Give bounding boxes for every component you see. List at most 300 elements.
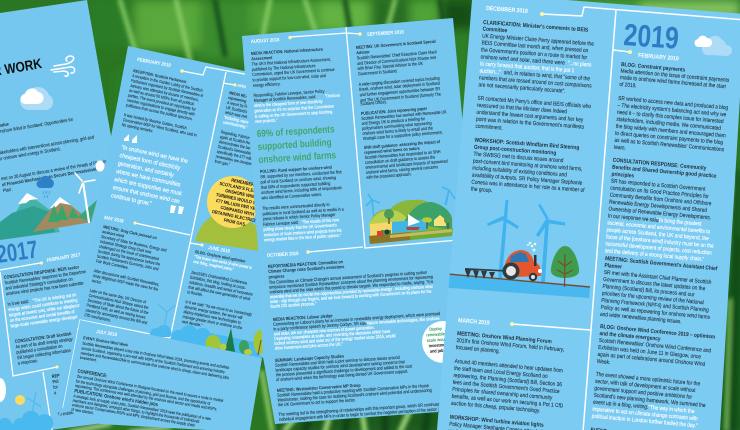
text: 2017 consultation: In it we said:: [7, 298, 29, 307]
callout: white circle quote: [422, 321, 446, 363]
text: report stub: a: [54, 390, 57, 395]
text: clarification: point was in relation to the Government's manifesto: [476, 116, 584, 131]
label: July 2018: JULY 2018: [96, 329, 118, 337]
text: Landscape Capacity Studies: Scottish Renewables and SNH held a joint seminar to discuss issues around: [275, 354, 401, 368]
text: Assistant Chief Planner: [600, 256, 718, 328]
text: Committee on Climate Change: essential that we do not let the opportunities provided by renewable energy - including onshore wind: [270, 283, 433, 299]
text: National Infrastructure Assessment: "Onshore: [325, 92, 341, 99]
text: polling: exclusion of most onshore wind projects from the: [264, 227, 343, 237]
text: Labour pledge: [273, 312, 440, 350]
text: constraint payments and consultation: and the delivery of a strong local supply chain.": [605, 248, 704, 263]
text: May 2018: Later on the same day, UK Director of: [89, 288, 147, 305]
text: constraint payments and consultation: CONSULTATION RESPONSE: Community: [612, 157, 707, 172]
timeline: February to July: [63, 67, 300, 408]
text: March 2019: focused on planning.: [456, 345, 500, 355]
text: Landscape Capacity Studies: landscape capacity studies for onshore wind development raising concerns that: [275, 359, 406, 373]
text: Landscape Capacity Studies: of onshore wind when the technology was being denied UK Government support.: [276, 368, 408, 382]
text: April column: "Including, repowering and new: [224, 115, 271, 130]
text: Assistant Chief Planner: priorities for the upcoming review of the National: [602, 291, 704, 306]
text: National Infrastructure Assessment: Assessment: [251, 55, 273, 61]
text: March 2019: auction for this cheap, popular technology.: [451, 400, 540, 415]
text: May 2018: CfD mechanisms.: [84, 313, 111, 323]
text: July 2018: repowering. The conference was well attended by the onshore wind sector and media and MSPs.: [75, 384, 218, 412]
text: constraint payments and consultation: principles: [611, 171, 634, 180]
text: polling: press release in which Senior Policy Manager: [263, 212, 336, 222]
text: National Infrastructure Assessment: to provide support for low-cost wind, solar and: [252, 73, 326, 83]
text: clarification: numbers that are tossed around on cost comparisons: [479, 75, 592, 90]
callout: white circle quote: investment: [428, 342, 449, 348]
text: Westminster Conservative MP Group: the UK Government to act to support the sector.: [278, 397, 356, 407]
text: September meeting: A wide-ranging discussion covered topics including: [359, 75, 440, 87]
text: reception: member organisations to engage directly with: [127, 98, 195, 117]
text: Onshore Wind Conference 2019: again as part of celebrations around Onshore Wind: [597, 352, 705, 368]
text: July 2018: Our annual Onshore Wind Conference in Glasgow focussed on the need to secure a route to market: [76, 374, 224, 403]
text: April column: which was met with interest.: [225, 110, 267, 124]
label: June 2018: JUNE 2018: [208, 245, 231, 254]
text: Committee on Climate Change: REPORT/MEDIA REACTION: Committee on: [268, 259, 344, 269]
text: Assistant Chief Planner: and wider renewables planning issues.: [600, 311, 682, 325]
text: Labour pledge: locked onshore wind and solar out of the energy market since 2015, would: [274, 333, 396, 346]
text: constraint payments and consultation: BLOG: Constraint payments: [621, 62, 685, 74]
text: June 2018: ZeroSSE's OnshoreWind Conference: [191, 270, 248, 286]
text: report stub: REP: [51, 373, 60, 379]
text: Labour pledge: in a party conference speech by Jeremy Corbyn, SR said:: [273, 320, 368, 332]
text: clarification: the Government's position on a route to market for: [481, 47, 588, 61]
text: National Infrastructure Assessment: energy efficiency.: [253, 81, 281, 88]
quote: onshore wind: where we have communities: [115, 169, 181, 189]
illustration: clouds and trees: [150, 304, 266, 363]
text: constraint payments and consultation: "To bring the greatest: [656, 217, 702, 228]
text: June 2018: dynamic energy system, the sector will: [184, 305, 243, 320]
text: July 2018: Scottish Renewables played a key role in Onshore Wind Week 2018, promoting events and activities: [82, 341, 230, 370]
text: constraint payments and consultation: the blog widely with members and encouraged them: [615, 123, 727, 140]
stat: 69 percent: [257, 126, 336, 163]
text: April column: [214, 82, 290, 176]
quote: onshore wind: continue to grow.”: [110, 193, 152, 208]
text: clarification: Group post-construction monitoring: [474, 144, 556, 157]
text: July 2018: of new starters.: [71, 407, 94, 415]
label: August 2018: AUGUST 2018: [251, 37, 280, 44]
text: National Infrastructure Assessment: generation so it's no surprise that the Commission: [254, 103, 334, 113]
callout: yellow circle quote: OBTAINING ELECTRICITY: [211, 209, 261, 224]
text: May 2018: MEETING: Greg Clark pressed on: [103, 225, 158, 241]
text: Assistant Chief Planner: Government to discuss the latest updates on the: [603, 277, 706, 293]
text: National Infrastructure Assessment: wind is the cheapest form of new electricity: [254, 98, 323, 108]
text: reception: Parliament organised by Scottish Renewables in: [131, 79, 204, 98]
text: clarification: post-consent bird monitoring at onshore wind farms,: [473, 158, 583, 173]
text: March 2019: fees and the Scottish Government's Good Practice: [453, 379, 560, 395]
text: draft energy strategy: published a consultation on: [16, 343, 63, 355]
text: May 2018: Fair Work Committee.: [95, 259, 129, 270]
text: 2017 consultation: CONSULTATION RESPONSE: BEIS sector: [3, 264, 80, 280]
text: constraint payments and consultation: made to onshore wind farms increased at the start: [620, 75, 727, 90]
text: SNH draft guidance: [364, 138, 449, 180]
text: September meeting: Scottish Renewables' Chief Executive Claire Mack: [356, 49, 438, 61]
text: September meeting: Advisor: [356, 49, 370, 55]
text: 2017 consultation: "The UK is missing out on: [32, 292, 77, 303]
icon: wind turbines: [487, 200, 565, 282]
page: December 2018 to 2019: [437, 0, 740, 430]
text: constraint payments and consultation: Renewable Energy Developments and Shared: [609, 199, 707, 214]
text: clarification: "...no plans: [567, 60, 592, 69]
text: September meeting: Brexit, onshore wind, solar deployment in Scotland: [359, 80, 440, 92]
text: June 2018: deploy implement new technologies to: [183, 310, 241, 325]
text: June 2018: manage greater short or onshore on the: [182, 315, 243, 330]
text: September meeting: Scotland Office).: [360, 99, 387, 106]
text: Landscape Capacity Studies: SEMINAR: Landscape Capacity Studies: [275, 353, 345, 363]
text: intro: of Financial Mechanisms to Secure Decommissioning,: [2, 165, 102, 187]
text: polling: SR, supported by our members, conducted the first: [260, 169, 342, 179]
text: Assistant Chief Planner: Planning Framework (NPF4) and Scottish Planning: [601, 298, 709, 314]
callout: white circle quote: scale would: [426, 336, 449, 343]
text: September meeting: and The UK Government in Scotland (formerly The: [360, 91, 442, 103]
text: 2017 consultation: targets at lowest cost, while our allegiance: [9, 302, 81, 318]
text: clarification: The SWBSG met to discuss issues around: [473, 151, 564, 164]
text: constraint payments and consultation: Community Benefits from Onshore and Offshore: [609, 192, 712, 208]
text: constraint payments and consultation: to direct queries on constraint payments to the blog: [615, 130, 723, 146]
text: June 2018: "The brave new world of wind power is: [194, 255, 252, 270]
text: Onshore Wind Conference 2019: government support and positive ambitions for: [594, 385, 692, 401]
text: clarification: including suitability of existing conditions and: [472, 165, 567, 179]
text: repowering paper: Scottish Renewables has worked with Renewable UK: [361, 109, 447, 121]
text: clarification: auction...": [479, 68, 501, 76]
text: Assistant Chief Planner: Planning (Scotland) Bill, its process and our: [602, 284, 695, 299]
label: February 2017: FEBRUARY 2017: [46, 252, 81, 263]
text: repowering paper: and Energy UK to produce a briefing for: [361, 116, 426, 126]
text: May 2018: After discussions with Scottish Renewables,: [93, 269, 160, 287]
text: May 2018: caused by uncertainty around the Bill and: [85, 308, 148, 325]
text: July 2018: [71, 336, 232, 430]
text: reception: Conservative MSP for West Scotland, who said in: [122, 118, 197, 138]
text: Labour pledge: "Mature renewable technologies, like onshore: [365, 315, 440, 326]
text: constraint payments and consultation: as well as to Scottish Renewables' Communications: [614, 137, 725, 153]
icon: clouds 2019: [694, 36, 732, 56]
text: June 2018: Exhibition, this blog, looking at cross-: [190, 275, 247, 290]
text: National Infrastructure Assessment: [251, 45, 342, 124]
label: October 2018: OCTOBER 2018: [267, 251, 299, 258]
text: intro: [0, 106, 111, 194]
text: constraint payments and consultation: of 2019.: [619, 82, 637, 90]
text: September meeting: and further engagement opportunities between SR: [359, 86, 440, 97]
text: June 2018: one thing, imagined pains.": [193, 260, 235, 272]
text: 2017 consultation: energy which could contribute to meeting: [8, 297, 78, 312]
callout: yellow circle quote: FROM GAS.: [223, 217, 247, 227]
text: Westminster Conservative MP Group: The meeting led to the strengthening of relationships with this important group, which SR continues: [278, 401, 440, 417]
text: September meeting: Government in Scotland.: [358, 68, 398, 77]
callout: white circle quote: Deploy: [429, 326, 443, 332]
text: intro: met on 26 August to discuss a review of the Heads of Planning: [1, 158, 109, 182]
callout: yellow circle quote: [195, 175, 268, 251]
icon: rain cloud: [36, 176, 54, 198]
text: draft energy strategy: a response.: [17, 358, 38, 366]
text: SNH draft guidance: Scottish Renewables has responded to an SNH: [364, 149, 441, 160]
text: Assistant Chief Planner: Planner: [604, 263, 622, 271]
text: SNH draft guidance: environmental and landscape impacts of repowered: [365, 158, 448, 170]
label: February 2019: FEBRUARY 2019: [638, 53, 679, 63]
text: March 2019: repowering, the Planning (Scotland) Bill, Section 36: [453, 373, 562, 388]
text: reception: as well as around 50 MSPs from all political: [129, 88, 194, 106]
text: September meeting: [356, 38, 442, 106]
text: Committee on Climate Change: The Committee on Climate Change's annual assessment of Scotland's progress in cutting carbon: [269, 269, 428, 285]
text: April column: repowering: [228, 96, 247, 104]
text: Committee on Climate Change: [268, 260, 434, 308]
text: April column: specifically the £77 million: [216, 149, 256, 162]
text: polling: poll of rural Scotland on onshore wind, showing: [260, 175, 336, 185]
text: clarification: and, in relation to wind, that "some of the: [504, 70, 590, 83]
text: April column: UK Scotland's onshore wind fleet: [226, 105, 277, 120]
label: May 2018: MAY 2018: [104, 215, 124, 224]
text: Committee on Climate Change: progress: [268, 273, 285, 280]
text: polling: The results were communicated directly to: [262, 201, 330, 211]
text: SNH draft guidance: onshore wind farms, raising several concerns: [366, 164, 438, 175]
text: April column: MEDIA REACTION: UK Government: [229, 91, 287, 107]
text: Westminster Conservative MP Group: Westminster, making the case for realising Scotland's onshore wind potential and underscoring: [277, 387, 432, 403]
text: 2017 consultation: [3, 263, 96, 329]
text: Labour pledge: MEDIA REACTION: Labour pledge: [273, 313, 333, 322]
text: National Infrastructure Assessment: The UK's first National Infrastructure Assessment,: [251, 56, 331, 67]
text: Assistant Chief Planner: MEETING: Scottish Government's Assistant Chief: [605, 256, 718, 273]
text: Onshore Wind Conference 2019: imperative to act on climate change contrasts with: [592, 406, 698, 423]
text: reception: his opening remarks:: [121, 123, 153, 133]
quote: onshore wind: [109, 145, 189, 214]
text: Committee on Climate Change: onshore wind and the risks which this posed to climate targets. We responded to media, saying: "It is: [269, 279, 433, 295]
text: Landscape Capacity Studies: the process presented a significant challenge to development and added to the cost: [276, 363, 413, 377]
text: May 2018: Industrial Strategy Greg Clark was: [100, 239, 152, 255]
text: Westminster Conservative MP Group: Scottish Renewables held a productive meeting with Scottish Conservative MPs in the House: [277, 383, 430, 398]
text: clarification: availability of outputs. SR Policy Manager Stephanie: [472, 172, 583, 187]
page: our work and 2017: [0, 0, 125, 430]
illustration: tractor: [502, 242, 542, 281]
quote: onshore wind: ensure that onshore wind can: [112, 185, 180, 205]
text: SNH draft guidance: with the proposed approach.: [366, 171, 412, 180]
callout: white circle quote: and jobs: [430, 347, 446, 354]
text: May 2018: Communications Nick Sharpe asked the: [88, 293, 149, 310]
illustration: mountains: [0, 193, 97, 240]
text: polling: onshore wind farms, including 60% of respondents: [261, 185, 342, 195]
text: May 2018: Scottish Parliament's Economy, Jobs and: [97, 254, 159, 271]
text: Labour pledge: drive investment and jobs across the UK.": [275, 341, 344, 351]
illustration: ground: [437, 273, 590, 298]
text: constraint payments and consultation: SR worked to access new data and produced a blog: [618, 96, 729, 112]
text: constraint payments and consultation: need it – to clarify this complex issue for interested: [617, 110, 724, 125]
callout: white circle quote: renewables: [426, 331, 448, 338]
text: National Infrastructure Assessment: Commission, urged the UK Government to continue: [252, 67, 335, 77]
icon: white cloud small: [96, 160, 104, 172]
text: reception: RECEPTION: Scottish Parliament: [133, 69, 187, 84]
text: polling: POLLING: Rural support for onshore wind: [260, 164, 332, 174]
text: clarification: commitment.: [475, 123, 503, 132]
text: Committee on Climate Change: solar - slip through our fingers, and we look forward to working with Government on its plans for the: [270, 288, 432, 304]
text: September meeting: with Brian Roy, Special Advisor to the UK: [357, 60, 423, 71]
text: polling: politicians in rural Scotland as well as to media in a: [262, 206, 344, 217]
heading: 2019: 2019: [623, 17, 680, 55]
text: clarification: CLARIFICATION: Minister's comments to BEIS: [483, 20, 589, 34]
text: polling: polling show clearly that the UK Government's: [263, 222, 337, 232]
text: constraint payments and consultation: societal, economic and environmental benefits to: [607, 220, 710, 236]
text: Onshore Wind Conference 2019: event up in a blog, writing:: [593, 399, 649, 411]
text: repowering paper: [361, 107, 447, 140]
text: Labour pledge: Commenting on Labour's plans for an increase in renewable energy deployment, which were promised: [273, 311, 441, 327]
icon: opening quote marks: [124, 134, 137, 143]
timeline: 2017: [0, 261, 59, 430]
text: SNH draft guidance: repowered wind farms on nature: [364, 145, 421, 155]
text: clarification: Committee: [482, 26, 508, 34]
stat: 69 percent: supported building: [257, 137, 332, 152]
text: report stub: Pol: [52, 378, 59, 385]
text: March 2019: Principles for shared ownership and community: [452, 386, 553, 402]
text: Onshore Wind Conference 2019: Week.: [597, 359, 611, 366]
text: Assistant Chief Planner: SR met with the Assistant Chief Planner at Scottish: [604, 270, 712, 286]
text: April column: again at Scottish Renewables: [219, 135, 265, 149]
text: Westminster Conservative MP Group: individual engagement with MPs in order to begin to combat the negative perception of the sector: [279, 406, 438, 422]
illustration: sun, turbine and cloud: [0, 378, 53, 430]
text: constraint payments and consultation: consultation on its Good Practice Principles for: [610, 185, 709, 200]
text: Committee on Climate Change: fourth CfD auction process.": [270, 301, 317, 309]
page: February May June 2018: [58, 46, 300, 420]
text: clarification: to carry forward that auction; that is the pot 1: [480, 61, 575, 74]
text: May 2018: Andy Wightman MSP made the case for the: [92, 274, 159, 292]
text: reception: January was attended by dozens of members,: [130, 83, 199, 102]
text: National Infrastructure Assessment: MEDIA REACTION: National Infrastructure: [251, 46, 324, 56]
text: Westminster Conservative MP Group: MEETING: Westminster Conservative MP Group: [277, 382, 361, 393]
text: draft energy strategy: As part of its draft energy strategy: [15, 336, 74, 350]
text: Labour pledge: and solar, are our cheapest new sources of power generation.: [274, 324, 375, 336]
text: May 2018: sector.: [91, 279, 102, 285]
text: Onshore Wind Conference 2019: political inaction in London further fuelled the day.": [591, 413, 698, 430]
callout: yellow circle quote: £77 MILLION PER YEAR: [216, 198, 262, 213]
label: February 2018: FEBRUARY 2018: [137, 57, 172, 68]
text: constraint payments and consultation: [605, 62, 732, 264]
text: Onshore Wind Conference 2019: [590, 324, 716, 430]
text: June 2018: BLOG: Onshore wind optimism: [195, 250, 246, 264]
text: National Infrastructure Assessment: Responding, Fabrice Leveque, Senior Policy: [253, 88, 325, 98]
text: Onshore Wind Conference 2019: Exhibition was held on June 11 in Glasgow, once: [598, 345, 701, 361]
text: Onshore Wind Conference 2019: "The way in which the: [648, 404, 695, 415]
text: May 2018: Secretary of State about the future of the: [87, 298, 149, 315]
text: polling: that 69% of respondents supported building: [261, 180, 330, 190]
text: Onshore Wind Conference 2019: The event showed a more optimistic future for the: [595, 371, 700, 388]
icon: closing quote marks: [170, 205, 184, 214]
text: National Infrastructure Assessment: published by The National Infrastructure: [252, 63, 316, 72]
text: May 2018: onshore wind: [102, 230, 125, 239]
text: April column: commissioning.": [223, 120, 248, 130]
text: National Infrastructure Assessment: new projects.": [255, 117, 278, 124]
text: repowering paper: strategic case for a supportive policy environment.: [363, 129, 443, 141]
text: 2017 consultation: and Industrial Strategy's consultation on: [5, 276, 74, 291]
text: April column: Regarding, Fabrice Leveque: [220, 130, 264, 143]
text: report stub: for: [53, 384, 59, 390]
text: clarification: the group.: [471, 186, 493, 194]
text: repowering paper: PUBLICATION: Joint repowering paper: [361, 105, 428, 116]
text: May 2018: Scottish during his appearance before the: [98, 249, 161, 267]
text: July 2018: PUBLICATION: Onshore wind's hidden jobs: [74, 388, 159, 407]
text: Onshore Wind Conference 2019: sector, with talk of development at scale without: [595, 378, 696, 394]
text: constraint payments and consultation: In our response we said:: [608, 213, 660, 224]
illustration: plough: [465, 268, 503, 279]
text: clarification: [471, 20, 597, 201]
text: clarification: onshore wind and solar, said there were: [480, 54, 565, 67]
text: clarification: are not necessarily particularly accurate".: [478, 82, 566, 95]
text: Onshore Wind Conference 2019: and the climate emergency: [599, 331, 661, 343]
text: constraint payments and consultation: – The electricity system's balancing act and why we: [617, 103, 727, 119]
text: intro: Plan'.: [3, 186, 13, 193]
text: July 2018: A strategic look at supply chain jobs, Scottish Renewables' 2018 sees the publication of a new: [73, 394, 211, 421]
text: constraint payments and consultation: people across Scotland, the UK and beyond, the: [606, 227, 709, 242]
text: draft energy strategy: SR began collecting information: [17, 347, 72, 360]
text: March 2019: 2019's first Onshore Wind Forum, held in February,: [456, 338, 564, 354]
text: report stub: [51, 373, 62, 395]
text: April column: from gas.": [214, 159, 231, 167]
text: constraint payments and consultation: Benefits and Shared Ownership good practice: [612, 164, 717, 180]
text: clarification: reassured us that the Minister does indeed: [477, 102, 567, 116]
text: March 2019: benefits, as well as our work on securing a Pot 1 CfD: [451, 393, 564, 410]
text: June 2018: next decade.": [181, 319, 203, 328]
text: May 2018: Secretary of State for Business, Energy and: [101, 235, 167, 253]
text: Onshore Wind Conference 2019: Scotland's new planning framework. We summed the: [593, 392, 706, 409]
text: clarification: Conesa was in attendance in her role as a member of: [471, 179, 585, 194]
text: March 2019: Around 40 members attended to hear updates from: [454, 359, 564, 375]
text: March 2019: WORKSHOP: Wind turbine aviation lights: [449, 414, 544, 429]
text: 2017 consultation: onshore wind projects has now been submitted.: [6, 280, 87, 296]
quote: onshore wind: generation, and certainly: [117, 161, 174, 179]
text: July 2018: members and Renewables2Me to communicate that onshore wind is cheap, clean and delivering jobs: [80, 351, 229, 380]
icon: clouds: [20, 87, 53, 110]
text: 2017 consultation: Scottish Renewables' response to the Department: [4, 268, 90, 286]
stat: 69 percent: onshore wind farms: [258, 149, 336, 165]
text: SNH draft guidance: consultation on draft guidance to assess the: [365, 154, 436, 165]
text: July 2018: members and designed, amongst other things, to highlight the thousands of individuals: [72, 398, 200, 424]
text: constraint payments and consultation: successful development of projects, cost reduction: [605, 241, 712, 257]
text: June 2018: to flourish.: [187, 290, 203, 297]
text: April column: Scotland's Renewables and: [217, 145, 260, 158]
text: reception: It was hosted by Maurice Golden, Scottish: [123, 113, 187, 130]
text: Westminster Conservative MP Group: [277, 384, 439, 421]
text: March 2019: [448, 331, 570, 430]
page: July 2018: [63, 320, 262, 430]
text: July 2018: EVENT: Onshore Wind Week: [83, 336, 129, 348]
label: September 2018: SEPTEMBER 2018: [367, 29, 404, 37]
label: December 2018: DECEMBER 2018: [486, 6, 528, 15]
text: July 2018: CONFERENCE:: [77, 368, 108, 379]
text: June 2018: [181, 250, 262, 337]
text: June 2018: solutions, breadth and series of innovators: [189, 280, 253, 297]
callout: yellow circle quote: REMEMBER:: [231, 177, 256, 188]
text: constraint payments and consultation: focus of the [onshore wind] industry must be on the: [606, 234, 714, 250]
text: clarification: UK Energy Minister Claire Perry appeared before the: [482, 33, 594, 48]
text: March 2019: MEETING: Onshore Wind Planning Forum: [457, 331, 552, 345]
text: draft energy strategy: [14, 331, 76, 366]
illustration: tree: [551, 246, 579, 287]
text: polling: "The results of this new: [301, 217, 339, 225]
icon: white turbine: [75, 173, 95, 222]
illustration: countryside scene: [366, 187, 455, 244]
text: National Infrastructure Assessment: Manager at Scottish Renewables, said:: [254, 94, 316, 103]
text: constraint payments and consultation: Media attention on the issue of constraint payments: [620, 68, 730, 84]
text: SNH draft guidance: SNH draft guidance: assessing the impact of: [364, 139, 441, 150]
text: Committee on Climate Change: Climate Change rates Scotland's emissions: [268, 264, 345, 274]
text: bottom fragment: To enable: [57, 409, 75, 417]
text: clarification: WORKSHOP: Scottish Windfarm Bird Steering: [474, 137, 579, 152]
timeline: December to 2019: [510, 7, 740, 430]
text: June 2018: In it we said: "As we move to an increasingly: [185, 300, 252, 317]
text: clarification: SR contacted Ms Perry's office and BEIS officials who: [477, 95, 591, 110]
text: Onshore Wind Conference 2019: BLOG: Onshore Wind Conference 2019 – optimism: [600, 324, 716, 341]
text: September meeting: and Director of Communications Nick Sharpe met: [357, 54, 437, 66]
text: Onshore Wind Conference 2019: Scottish Renewables' Onshore Wind Conference and: [599, 338, 711, 355]
text: National Infrastructure Assessment: is calling on the UK Government to stop blocking: [255, 109, 332, 119]
label: March 2019: MARCH 2019: [458, 318, 490, 327]
text: polling: energy market flies in the face of public opinion.": [264, 232, 342, 242]
